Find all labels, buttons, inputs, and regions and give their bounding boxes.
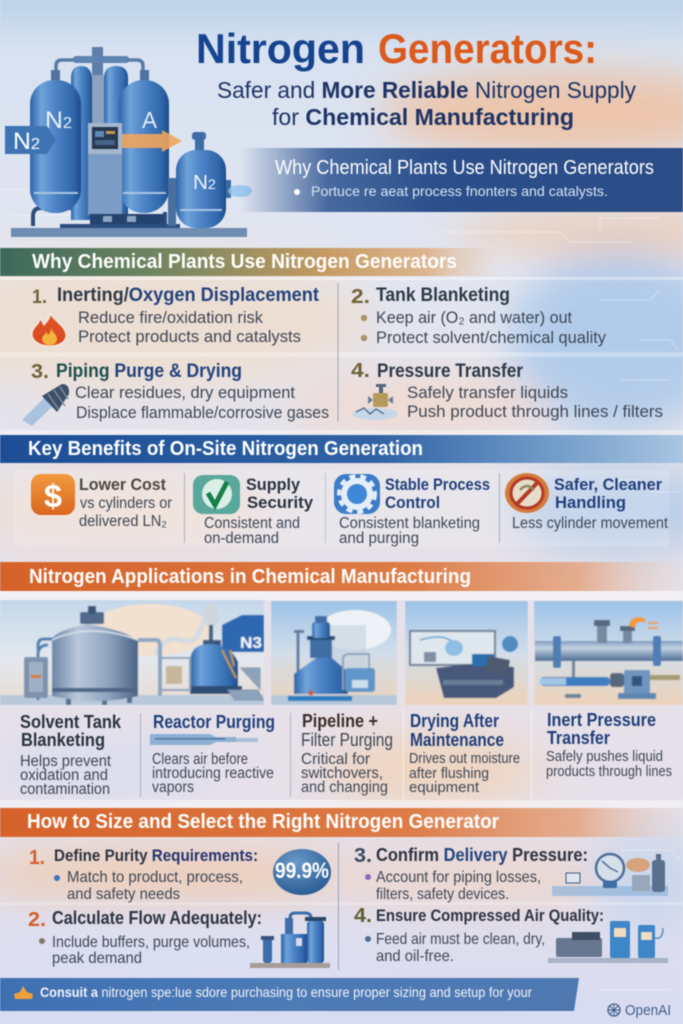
card: pressure transfer: 4. bbox=[351, 360, 370, 382]
caption: pipeline and filter purging: Pipeline + bbox=[302, 711, 378, 731]
card: tank blanketing: Tank Blanketing bbox=[376, 285, 510, 306]
text: footer note: Consuit a nitrogen spe:lue sdore purchasing to ensure proper sizing and setup for your bbox=[40, 984, 532, 1000]
caption: pipeline and filter purging: switchovers, bbox=[301, 765, 383, 782]
icon: dollar bbox=[31, 474, 75, 515]
step: define purity: and safety needs bbox=[67, 886, 180, 903]
step: compressed air quality: Ensure Compressed Air Quality: bbox=[376, 906, 604, 925]
benefit: supply security: Consistent and bbox=[204, 515, 300, 532]
caption: reactor purging: Reactor Purging bbox=[153, 712, 275, 732]
card: piping purge: 3. bbox=[31, 361, 49, 383]
panel: application captions bbox=[20, 710, 672, 800]
arrow: N2 input tag: N2 bbox=[13, 128, 40, 155]
arrow: orange flow bbox=[122, 130, 182, 152]
caption: solvent tank blanketing: contamination bbox=[20, 781, 110, 798]
card: tank blanketing bbox=[351, 285, 606, 347]
icon: pipe bbox=[22, 384, 69, 426]
caption: reactor purging: vapors bbox=[152, 779, 194, 796]
badge: 99.9 percent bbox=[273, 849, 331, 895]
illustration: reactor unit bbox=[271, 601, 397, 705]
step: confirm pressure: 3. bbox=[354, 845, 372, 867]
step: calculate flow: Calculate Flow Adequately: bbox=[52, 908, 262, 928]
caption: drying after maintenance: equipment bbox=[409, 779, 480, 796]
icon: upper valves bbox=[594, 620, 635, 643]
badge: 99.9 percent: 99.9% bbox=[275, 858, 329, 883]
benefit: lower cost: delivered LN₂ bbox=[79, 513, 167, 530]
section header: sizing bbox=[0, 808, 683, 837]
caption: solvent tank blanketing bbox=[20, 712, 122, 798]
benefit: supply security: Security bbox=[247, 493, 314, 512]
icon: right tank: A bbox=[142, 107, 158, 133]
section header: why chemical plants bbox=[0, 248, 500, 276]
card: pressure transfer: Pressure Transfer bbox=[377, 361, 524, 382]
icon: right tank bbox=[119, 70, 169, 213]
caption: drying after maintenance: Drives out moisture bbox=[409, 750, 520, 767]
card: pressure transfer: Safely transfer liquids bbox=[407, 383, 568, 402]
benefit: stable process bbox=[334, 474, 490, 547]
card: tank blanketing: 2. bbox=[351, 286, 370, 308]
icon: gear bbox=[334, 474, 380, 514]
caption: pipeline and filter purging bbox=[301, 711, 393, 796]
illustration: pressure transfer pipes bbox=[534, 601, 683, 705]
logo: OpenAI: OpenAI bbox=[625, 1002, 671, 1019]
section header: why chemical plants: Why Chemical Plants Use Nitrogen Generators bbox=[32, 251, 457, 273]
icon: side tank bbox=[343, 654, 375, 692]
benefit: stable process: Control bbox=[385, 493, 440, 512]
illustration: nitrogen generator skid bbox=[5, 47, 252, 237]
caption: inert pressure transfer: Transfer bbox=[547, 728, 610, 748]
step: confirm pressure: Account for piping losses, bbox=[376, 869, 541, 886]
benefit: safer handling: Handling bbox=[555, 493, 626, 512]
step: compressed air quality bbox=[354, 905, 668, 965]
caption: reactor purging: Clears air before bbox=[152, 751, 248, 768]
icon: main pipe bbox=[535, 636, 683, 668]
heading: why banner: Why Chemical Plants Use Nitrogen Generators bbox=[275, 157, 654, 179]
card: inerting: Reduce fire/oxidation risk bbox=[78, 308, 263, 327]
section header: key benefits: Key Benefits of On-Site Nitrogen Generation bbox=[28, 438, 423, 460]
panel: why cards bbox=[22, 283, 663, 426]
step: confirm pressure bbox=[354, 845, 668, 903]
illustration: solvent tank and reactor bbox=[0, 600, 264, 705]
caption: pipeline and filter purging: and changing bbox=[301, 779, 388, 796]
icon: back vessels bbox=[71, 66, 128, 220]
caption: drying after maintenance: Drying After bbox=[410, 711, 499, 731]
step: compressed air quality: 4. bbox=[354, 905, 372, 927]
step: confirm pressure: filters, safety devices. bbox=[376, 886, 509, 903]
benefit: safer handling: Less cylinder movement bbox=[512, 515, 669, 532]
section header: applications bbox=[0, 562, 683, 591]
benefit: supply security bbox=[193, 475, 314, 547]
icon: check bbox=[193, 475, 240, 514]
card: inerting bbox=[32, 285, 320, 346]
card: tank blanketing: Keep air (O₂ and water) out bbox=[376, 308, 572, 327]
subtitle line one: Safer and More Reliable Nitrogen Supply bbox=[217, 77, 636, 103]
caption: drying after maintenance: Maintenance bbox=[410, 730, 504, 750]
title: Generators: Generators: bbox=[378, 25, 597, 72]
label: N3 tag: N3 bbox=[240, 635, 262, 652]
icon: no-cylinder sign bbox=[505, 473, 549, 513]
icon: frame bbox=[410, 631, 518, 665]
panel: sizing steps bbox=[28, 843, 668, 970]
card: piping purge: Piping Purge & Drying bbox=[56, 361, 242, 382]
icon: base plate bbox=[11, 228, 247, 237]
icon: top manifold bbox=[56, 47, 143, 107]
step: define purity bbox=[29, 847, 331, 903]
step: define purity: Match to product, process, bbox=[67, 869, 243, 886]
step: define purity: 1. bbox=[29, 847, 45, 869]
caption: solvent tank blanketing: oxidation and bbox=[20, 767, 108, 784]
icon: dollar: $ bbox=[44, 478, 62, 514]
section header: key benefits bbox=[0, 435, 683, 463]
caption: inert pressure transfer: Inert Pressure bbox=[547, 710, 656, 730]
caption: pipeline and filter purging: Filter Purging bbox=[301, 730, 393, 750]
icon: small nitrogen receiver: N2 bbox=[193, 172, 216, 194]
card: pressure transfer: Push product through lines / filters bbox=[407, 402, 663, 421]
card: inerting: Protect products and catalysts bbox=[78, 327, 301, 346]
icon: small nitrogen receiver bbox=[168, 132, 252, 228]
caption: reactor purging bbox=[150, 712, 275, 796]
text: banner bullet: Portuce re aeat process fnonters and catalysts. bbox=[311, 183, 608, 199]
panel: why banner bbox=[240, 148, 683, 212]
benefit: stable process: and purging bbox=[339, 530, 419, 547]
icon: main tank bbox=[38, 606, 160, 705]
icon: central control column bbox=[88, 123, 164, 224]
benefit: safer handling bbox=[505, 473, 669, 532]
title bbox=[196, 25, 636, 130]
step: compressed air quality: and oil-free. bbox=[376, 948, 454, 965]
caption: inert pressure transfer bbox=[546, 710, 672, 780]
benefit: supply security: on-demand bbox=[204, 530, 279, 547]
card: inerting: 1. bbox=[32, 287, 47, 308]
caption: drying after maintenance: after flushing bbox=[409, 765, 489, 782]
icon: pressure gauge bench bbox=[552, 854, 668, 896]
caption: solvent tank blanketing: Solvent Tank bbox=[20, 712, 122, 732]
icon: orange marker bbox=[629, 617, 658, 629]
icon: lower pipe and pump bbox=[538, 661, 680, 699]
caption: solvent tank blanketing: Helps prevent bbox=[20, 753, 112, 770]
step: calculate flow: Include buffers, purge volumes, bbox=[52, 934, 250, 951]
caption: solvent tank blanketing: Blanketing bbox=[21, 730, 105, 750]
icon: lance bbox=[150, 734, 258, 745]
illustration: drying machine bbox=[405, 601, 528, 705]
benefit: stable process: Consistent blanketing bbox=[339, 515, 480, 532]
title: Nitrogen: Nitrogen bbox=[196, 25, 365, 72]
benefit: supply security: Supply bbox=[246, 475, 301, 494]
icon: skid legs bbox=[33, 208, 180, 226]
section header: applications: Nitrogen Applications in Chemical Manufacturing bbox=[29, 566, 471, 588]
icon: left tank bbox=[30, 70, 81, 213]
section header: sizing: How to Size and Select the Right Nitrogen Generator bbox=[27, 811, 499, 833]
icon: machine bbox=[424, 652, 514, 698]
caption: inert pressure transfer: Safely pushes liquid bbox=[546, 748, 663, 765]
step: compressed air quality: Feed air must be clean, dry, bbox=[376, 931, 545, 948]
icon: vessel bbox=[288, 616, 352, 701]
caption: pipeline and filter purging: Critical for bbox=[301, 751, 370, 768]
logo: OpenAI bbox=[608, 1002, 671, 1019]
footer callout bbox=[0, 978, 579, 1011]
benefit: stable process: Stable Process bbox=[385, 475, 490, 494]
icon: left tank: N2 bbox=[45, 107, 72, 134]
benefit: lower cost: Lower Cost bbox=[79, 475, 166, 494]
benefit: lower cost bbox=[31, 474, 172, 530]
arrow: N2 input tag bbox=[5, 126, 56, 155]
panel: benefits bbox=[14, 470, 669, 547]
icon: air treatment units bbox=[548, 921, 668, 963]
step: calculate flow bbox=[28, 908, 330, 968]
benefit: lower cost: vs cylinders or bbox=[80, 495, 172, 512]
icon: valve bbox=[352, 384, 398, 420]
label: N3 tag bbox=[222, 615, 264, 652]
icon: reactor bbox=[160, 604, 263, 700]
caption: reactor purging: introducing reactive bbox=[152, 765, 274, 782]
card: tank blanketing: Protect solvent/chemical quality bbox=[376, 328, 606, 347]
step: calculate flow: peak demand bbox=[52, 950, 142, 967]
icon: flame bbox=[32, 312, 66, 346]
step: confirm pressure: Confirm Delivery Pressure: bbox=[376, 845, 588, 865]
icon: warning bbox=[14, 986, 33, 999]
subtitle line two: for Chemical Manufacturing bbox=[272, 104, 574, 130]
icon: control box bbox=[24, 657, 48, 698]
card: piping purge bbox=[22, 361, 329, 426]
caption: drying after maintenance bbox=[409, 711, 520, 796]
card: piping purge: Clear residues, dry equipment bbox=[75, 383, 295, 402]
card: piping purge: Displace flammable/corrosive gases bbox=[76, 403, 329, 422]
benefit: safer handling: Safer, Cleaner bbox=[554, 475, 662, 494]
icon: generator unit bbox=[250, 913, 330, 968]
card: pressure transfer bbox=[351, 360, 663, 421]
step: calculate flow: 2. bbox=[28, 909, 46, 931]
card: inerting: Inerting/Oxygen Displacement bbox=[57, 285, 320, 306]
step: define purity: Define Purity Requirements: bbox=[54, 847, 258, 865]
